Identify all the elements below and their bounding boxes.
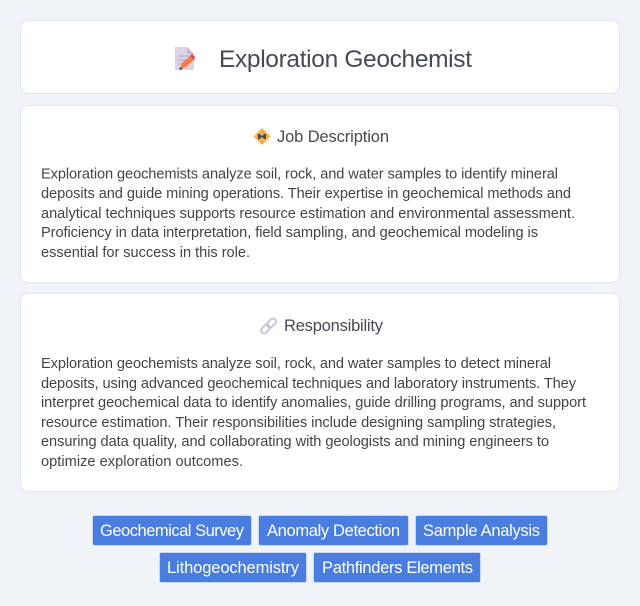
icon: puzzle diamond <box>254 129 270 144</box>
tag: geochemical survey <box>92 516 252 546</box>
tag: geochemical survey: Geochemical Survey <box>100 522 245 540</box>
tag: pathfinders elements: Pathfinders Elements <box>322 559 473 577</box>
text block: job description: deposits and guide mining operations. Their expertise in geochemical methods and <box>41 186 571 202</box>
text block: responsibility: ensuring data quality, and collaborating with geologists and mining engineers to <box>41 434 549 450</box>
tag: sample analysis: Sample Analysis <box>423 522 540 540</box>
text block: responsibility: optimize exploration outcomes. <box>41 454 243 470</box>
text block: responsibility <box>41 356 586 470</box>
text block: job description: analytical techniques supports resource estimation and environmental assessment. <box>41 206 575 222</box>
text block: job description: Proficiency in data interpretation, field sampling, and geochemical modeling is <box>41 225 538 241</box>
tag: anomaly detection <box>258 516 408 546</box>
text block: responsibility: resource estimation. Their responsibilities include designing sampling strategies, <box>41 415 556 431</box>
text block: job description: essential for success in this role. <box>41 245 250 261</box>
tag: sample analysis <box>416 516 548 546</box>
tag: pathfinders elements <box>314 552 480 582</box>
panel: title card <box>20 20 620 94</box>
text block: responsibility: deposits, using advanced geochemical techniques and laboratory instruments. They <box>41 376 577 392</box>
tag: lithogeochemistry <box>160 552 306 582</box>
tag group <box>92 516 548 582</box>
heading: responsibility: Responsibility <box>284 317 384 335</box>
text block: responsibility: Exploration geochemists analyze soil, rock, and water samples to detect mineral <box>41 356 551 372</box>
text block: responsibility: interpret geochemical data to identify anomalies, guide drilling programs, and support <box>41 395 586 411</box>
tag: anomaly detection: Anomaly Detection <box>267 522 400 540</box>
tag: lithogeochemistry: Lithogeochemistry <box>167 559 300 577</box>
icon: document with pencil <box>175 47 195 70</box>
title: Exploration Geochemist <box>219 46 472 73</box>
text block: job description: Exploration geochemists analyze soil, rock, and water samples to identify mineral <box>41 166 558 182</box>
icon: chain link <box>260 317 277 335</box>
panel: responsibility <box>20 294 620 492</box>
panel: job description <box>20 106 620 282</box>
text block: job description <box>41 166 575 261</box>
heading: job description: Job Description <box>277 128 389 146</box>
